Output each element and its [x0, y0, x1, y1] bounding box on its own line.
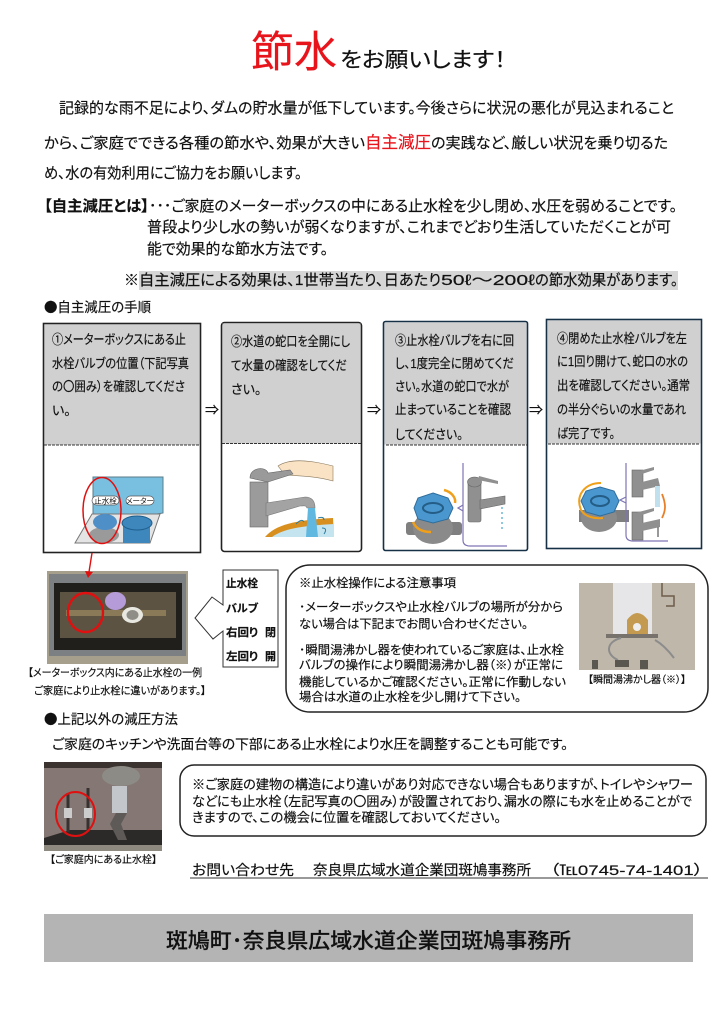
arrow: step 3 to 4: ⇒ [529, 402, 543, 418]
panel: cautions: 機能しているかご確認ください。正常に作動しない [299, 674, 566, 689]
panel: step 3: さい。水道の蛇口で水が [395, 379, 509, 394]
panel: step 4: の半分ぐらいの水量であれ [557, 402, 686, 417]
caption: meter box photo: ご家庭により止水栓に違いがあります。】 [34, 684, 206, 697]
text: other methods description: ご家庭のキッチンや洗面台等の下部にある止水栓により水圧を調整することも可能です。 [52, 736, 568, 752]
callout: valve direction arrow box: 左回り [226, 649, 258, 663]
caption: under-sink photo: 【ご家庭内にある止水栓】 [50, 853, 157, 866]
panel: step 4: に1回り開けて、蛇口の水の [557, 354, 688, 369]
caption: water heater photo: 【瞬間湯沸かし器（※）】 [588, 673, 686, 686]
definition of self pressure reduction: 能で効果的な節水方法です。 [147, 241, 328, 258]
highlighted effect note: 50ℓ～200ℓ [441, 272, 535, 289]
icon: hand on faucet [250, 461, 334, 537]
highlighted effect note: の節水効果があります。 [535, 272, 678, 289]
callout: valve direction arrow box: 閉 [265, 626, 276, 639]
panel: cautions: ･メーターボックスや止水栓バルブの場所が分から [299, 599, 563, 614]
callout: valve direction arrow box: 開 [265, 650, 276, 663]
panel: step 3: してください。 [395, 427, 463, 442]
heading: procedure: ●自主減圧の手順 [44, 296, 151, 316]
panel: building note: などにも止水栓（左記写真の〇囲み）が設置されており、漏水の際にも水を止めることがで [192, 794, 693, 809]
caption: meter box photo [28, 666, 206, 697]
panel: step 2: さい。 [231, 382, 261, 397]
panel: cautions: 場合は水道の止水栓を少し開けて下さい。 [299, 690, 521, 704]
panel: step 1: 水栓バルブの位置（下記写真 [52, 356, 189, 371]
panel: building note [180, 765, 706, 836]
photo: under-sink valve [44, 762, 162, 851]
highlighted effect note [124, 269, 678, 290]
panel: step 3: し、1度完全に閉めてくだ [395, 356, 514, 371]
definition of self pressure reduction: 普段より少し水の勢いが弱くなりますが、これまでどおり生活していただくことが可 [147, 219, 671, 236]
definition of self pressure reduction [44, 197, 677, 258]
panel: step 1: の〇囲み）を確認してくださ [52, 379, 185, 394]
highlighted effect note: ※ [124, 269, 139, 290]
callout: valve direction arrow box: バルブ [226, 601, 259, 615]
panel: step 4 [546, 320, 702, 548]
panel: step 1 [44, 324, 200, 552]
panel: step 1: ①メーターボックスにある止 [52, 332, 186, 347]
icon: meter box illustration: 止水栓 [94, 496, 117, 506]
panel: step 3: ③止水栓バルブを右に回 [395, 333, 514, 348]
footer banner [44, 914, 693, 962]
intro paragraph: の実践など、厳しい状況を乗り切るた [431, 135, 668, 152]
definition of self pressure reduction: 【自主減圧とは】 [44, 197, 149, 215]
icon: valve closing [406, 463, 507, 546]
callout: valve direction arrow box: 止水栓 [226, 576, 258, 590]
contact line: お問い合わせ先 [192, 862, 294, 878]
photo: meter box interior [47, 571, 188, 664]
panel: step 4: ば完了です。 [557, 426, 615, 441]
title: 節水 [251, 29, 337, 77]
heading: other methods: ●上記以外の減圧方法 [44, 708, 178, 728]
caption: meter box photo: 【メーターボックス内にある止水栓の一例 [28, 666, 202, 679]
panel: building note: きますので、この機会に位置を確認しておいてください。 [192, 810, 501, 825]
arrow: red pointer from illustration to photo [85, 553, 93, 578]
intro paragraph: め、水の有効利用にご協力をお願いします。 [44, 165, 302, 182]
contact line: 奈良県広域水道企業団斑鳩事務所 [313, 862, 531, 878]
intro paragraph: から、ご家庭でできる各種の節水や、効果が大きい [44, 135, 365, 152]
highlighted effect note: 自主減圧による効果は、1世帯当たり、日あたり [139, 272, 441, 289]
panel: cautions: ※止水栓操作による注意事項 [299, 574, 456, 591]
icon: valve opening [579, 463, 668, 541]
panel: step 2 [222, 322, 362, 552]
panel: step 3 [384, 322, 528, 550]
panel: cautions: ない場合は下記までお問い合わせください。 [299, 617, 528, 631]
icon: meter box illustration: メーター [126, 496, 154, 506]
photo: instant water heater [579, 583, 695, 670]
intro paragraph: 記録的な雨不足により、ダムの貯水量が低下しています。今後さらに状況の悪化が見込まれること [59, 100, 674, 117]
panel: cautions: バルブの操作により瞬間湯沸かし器（※）が正常に [299, 657, 563, 672]
panel: cautions [286, 565, 708, 712]
panel: step 2: ②水道の蛇口を全開にし [231, 334, 350, 349]
arrow: step 1 to 2: ⇒ [205, 402, 219, 418]
callout: valve direction arrow box: 右回り [226, 625, 258, 639]
intro paragraph: 自主減圧 [365, 133, 431, 152]
definition of self pressure reduction: ･･･ご家庭のメーターボックスの中にある止水栓を少し閉め、水圧を弱めることです。 [149, 198, 677, 215]
icon: meter box illustration [75, 477, 163, 544]
title: をお願いします！ [340, 49, 506, 72]
panel: step 2: て水量の確認をしてくだ [231, 358, 347, 373]
title [251, 29, 506, 77]
contact line [190, 862, 708, 878]
arrow: step 2 to 3: ⇒ [367, 402, 381, 418]
callout: valve direction arrow box [195, 570, 278, 667]
panel: step 4: 出を確認してください。通常 [557, 378, 690, 393]
panel: step 4: ④閉めた止水栓バルブを左 [557, 331, 687, 346]
footer banner: 斑鳩町･奈良県広域水道企業団斑鳩事務所 [166, 930, 571, 953]
panel: building note: ※ご家庭の建物の構造により違いがあり対応できない場合もありますが、トイレやシャワー [192, 777, 693, 792]
panel: cautions: ･瞬間湯沸かし器を使われているご家庭は、止水栓 [299, 642, 564, 657]
contact line: （℡0745-74-1401） [550, 862, 703, 878]
panel: step 3: 止まっていることを確認 [395, 402, 511, 417]
panel: step 1: い。 [52, 403, 71, 418]
intro paragraph [44, 100, 674, 182]
